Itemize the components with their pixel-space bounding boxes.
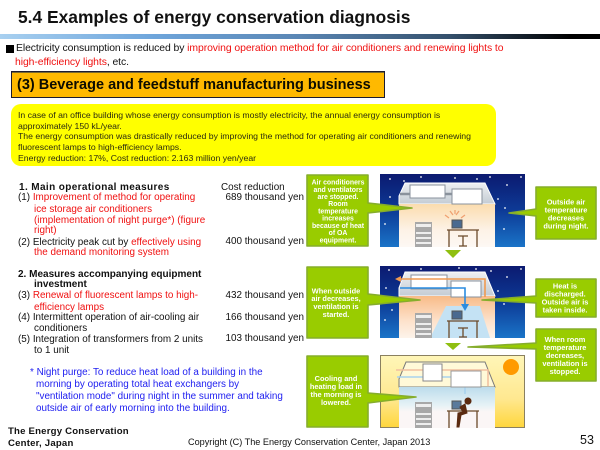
callout: air conditioners stopped: increases [322,215,354,222]
yellow case description: fluorescent lamps to high-efficiency lamps. [18,142,182,152]
summary statement: high-efficiency lights, etc. [15,57,129,68]
measures list: the demand monitoring system [34,247,169,258]
organisation name [8,426,129,449]
callout: ventilation stopped: decreases, [546,351,584,360]
night purge note: "ventilation mode" during night in the summer and taking [36,391,283,402]
cost reduction column: Cost reduction [221,182,285,193]
callout: ventilation started [307,267,420,338]
callout: air conditioners stopped: temperature [318,208,358,215]
callout: outside air temperature decreases: Outside air [547,198,585,206]
cost reduction column: 432 thousand yen [225,290,304,301]
organisation name: Center, Japan [8,438,74,449]
cost reduction column: 400 thousand yen [225,236,304,247]
callout: heat discharged: Heat is [553,282,577,290]
measures list: (5) Integration of transformers from 2 units [18,334,203,345]
measures list: (2) Electricity peak cut by effectively using [18,237,201,248]
callout: heat discharged: discharged. [544,290,586,298]
cost reduction column: 103 thousand yen [225,333,304,344]
measures list: ice storage air conditioners [34,204,152,215]
callout: ventilation stopped [468,329,596,381]
callout: air conditioners stopped: because of heat [312,223,365,230]
measures list: to 1 unit [34,345,69,356]
callout: outside air temperature decreases: temperature [545,206,587,214]
bullet square [6,45,14,53]
yellow case description: In case of an office building whose energy consumption is mostly electricity, the annual energy consumption is [18,110,440,120]
title: 5.4 Examples of energy conservation diagnosis [18,7,410,27]
night purge note: * Night purge: To reduce heat load of a building in the [30,367,263,378]
section heading: beverage and feedstuff: (3) Beverage and feedstuff manufacturing business [17,77,371,93]
yellow case description: approximately 150 kL/year. [18,121,122,131]
callout: air conditioners stopped: and ventilators [313,187,363,194]
night purge note: outside air of early morning into the building. [36,403,230,414]
icon: seated person [457,398,471,427]
measures list: investment [34,279,87,290]
callout: air conditioners stopped: Room [328,201,348,208]
cost reduction column [221,182,304,344]
copyright: Copyright (C) The Energy Conservation Center, Japan 2013 [188,437,430,447]
measures list: (3) Renewal of fluorescent lamps to high- [18,290,198,301]
cost reduction column: 689 thousand yen [225,192,304,203]
callout: air conditioners stopped: are stopped. [318,194,359,201]
callout: ventilation stopped: stopped. [550,367,580,376]
callout: air conditioners stopped: Air conditioners [312,179,365,186]
callout: cooling and heating load lowered [307,356,416,427]
icon: sun [503,359,519,375]
summary statement: Electricity consumption is reduced by improving operation method for air conditioners and renewing lights to [16,43,503,54]
heading: measures accompanying equipment investment: 2. Measures accompanying equipment [18,269,201,280]
measures list: conditioners [34,323,87,334]
page number: 53 [580,433,594,447]
cost reduction column: 166 thousand yen [225,312,304,323]
night purge note [30,367,283,414]
callout: air conditioners stopped [307,175,412,246]
callout: heat discharged: Outside air is [542,298,588,306]
callout: cooling and heating load lowered: heating load in [310,382,363,391]
yellow case description [11,104,496,166]
callout: air conditioners stopped: equipment. [320,238,356,245]
measures list: efficiency lamps [34,302,104,313]
illustration: night, ventilation running [380,266,525,338]
night purge note: morning by operating total heat exchangers by [36,379,239,390]
callout: ventilation started: air decreases, [311,294,361,303]
callout: cooling and heating load lowered: the morning is [311,390,361,399]
callout: ventilation started: started. [323,310,349,319]
measures list: (1) Improvement of method for operating [18,192,195,203]
next-step arrow 1 [445,250,461,258]
measures list [18,182,205,356]
illustration: morning, lowered load [380,356,524,428]
callout: ventilation stopped: temperature [544,343,586,352]
measures list: right) [34,225,56,236]
callout: ventilation stopped: When room [545,335,586,344]
callout: ventilation started: ventilation is [313,302,359,311]
measures list: (implementation of night purge*) (figure [34,215,205,226]
title gradient rule [0,34,600,39]
illustration: night, ventilators stopped [380,174,525,247]
callout: ventilation started: When outside [312,286,360,296]
organisation name: The Energy Conservation [8,426,129,437]
callout: outside air temperature decreases: decreases [548,214,584,222]
callout: cooling and heating load lowered: Cooling and [315,374,358,383]
callout: heat discharged: taken inside. [543,306,587,314]
next-step arrow 2 [445,343,461,350]
callout: outside air temperature decreases: during night. [543,222,589,230]
callout: ventilation stopped: ventilation is [542,359,588,368]
summary statement [6,43,504,68]
callout: cooling and heating load lowered: lowered. [321,398,351,407]
callout: air conditioners stopped: of OA [329,230,347,237]
heading: main operational measures: 1. Main operational measures [19,182,170,193]
section heading: beverage and feedstuff [11,71,385,98]
callout: heat discharged [482,279,596,317]
yellow case description: Energy reduction: 17%, Cost reduction: 2.163 million yen/year [18,153,256,163]
yellow case description: The energy consumption was drastically reduced by improving the method for operating air conditioners and renewing [18,131,471,141]
callout: outside air temperature decreases [509,187,596,239]
measures list: (4) Intermittent operation of air-cooling air [18,312,199,323]
